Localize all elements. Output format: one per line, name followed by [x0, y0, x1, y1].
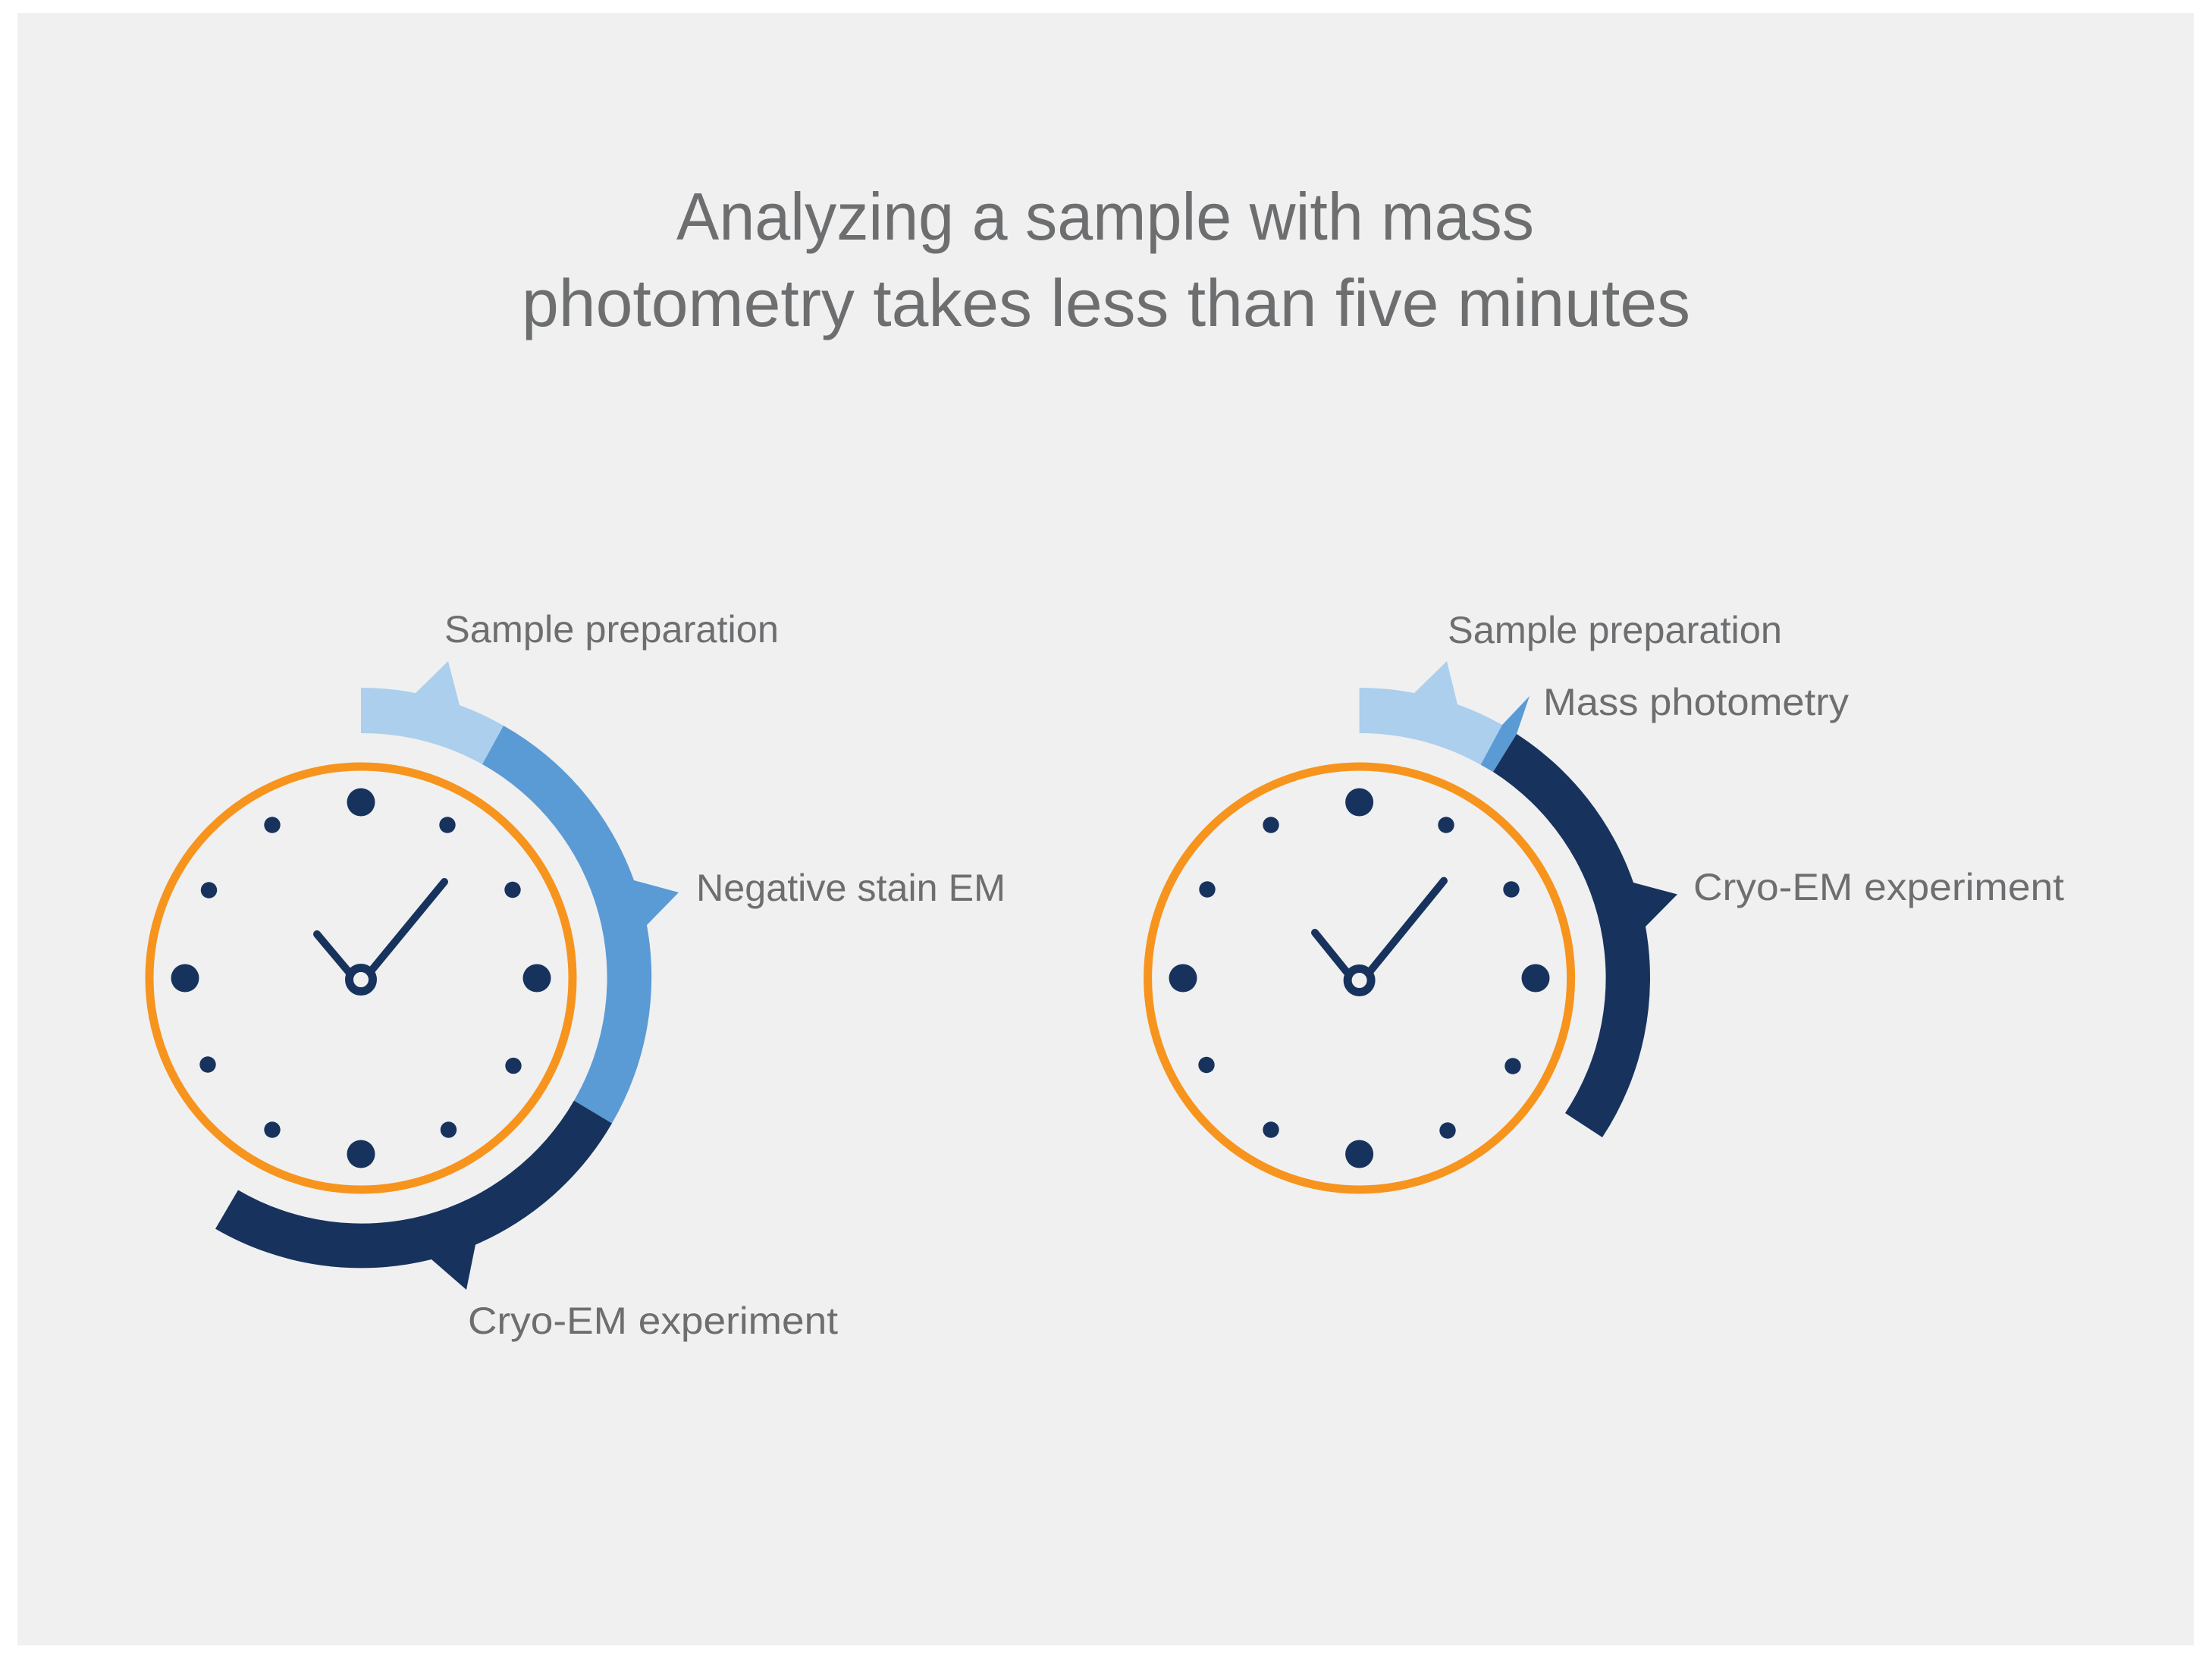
arc: sample preparation [361, 661, 504, 764]
title: Analyzing a sample with mass [676, 179, 1534, 254]
clock ring [149, 767, 573, 1190]
labels: Mass photometry [1543, 681, 1849, 723]
arc: sample preparation [1360, 661, 1502, 765]
arc: mass photometry [1481, 696, 1530, 772]
labels: Cryo-EM experiment [468, 1300, 838, 1342]
labels: Sample preparation [444, 608, 779, 651]
left clock: negative stain and cryo-EM workflow [149, 608, 1006, 1342]
labels: Sample preparation [1448, 609, 1782, 651]
labels: Cryo-EM experiment [1693, 866, 2064, 908]
title: photometry takes less than five minutes [522, 265, 1690, 340]
arc: cryo-EM experiment [215, 1101, 612, 1290]
labels [1448, 609, 2064, 908]
hour markers [171, 789, 551, 1168]
title [522, 179, 1690, 340]
right clock: mass photometry and cryo-EM workflow [1148, 609, 2064, 1190]
clock hands [1315, 881, 1444, 992]
arc: negative stain EM [482, 726, 679, 1124]
clock hands [317, 882, 444, 992]
labels: Negative stain EM [696, 867, 1006, 909]
labels [444, 608, 1006, 1342]
arc: cryo-EM experiment [1493, 734, 1677, 1137]
hour markers [1169, 789, 1550, 1168]
clock ring [1148, 767, 1571, 1190]
